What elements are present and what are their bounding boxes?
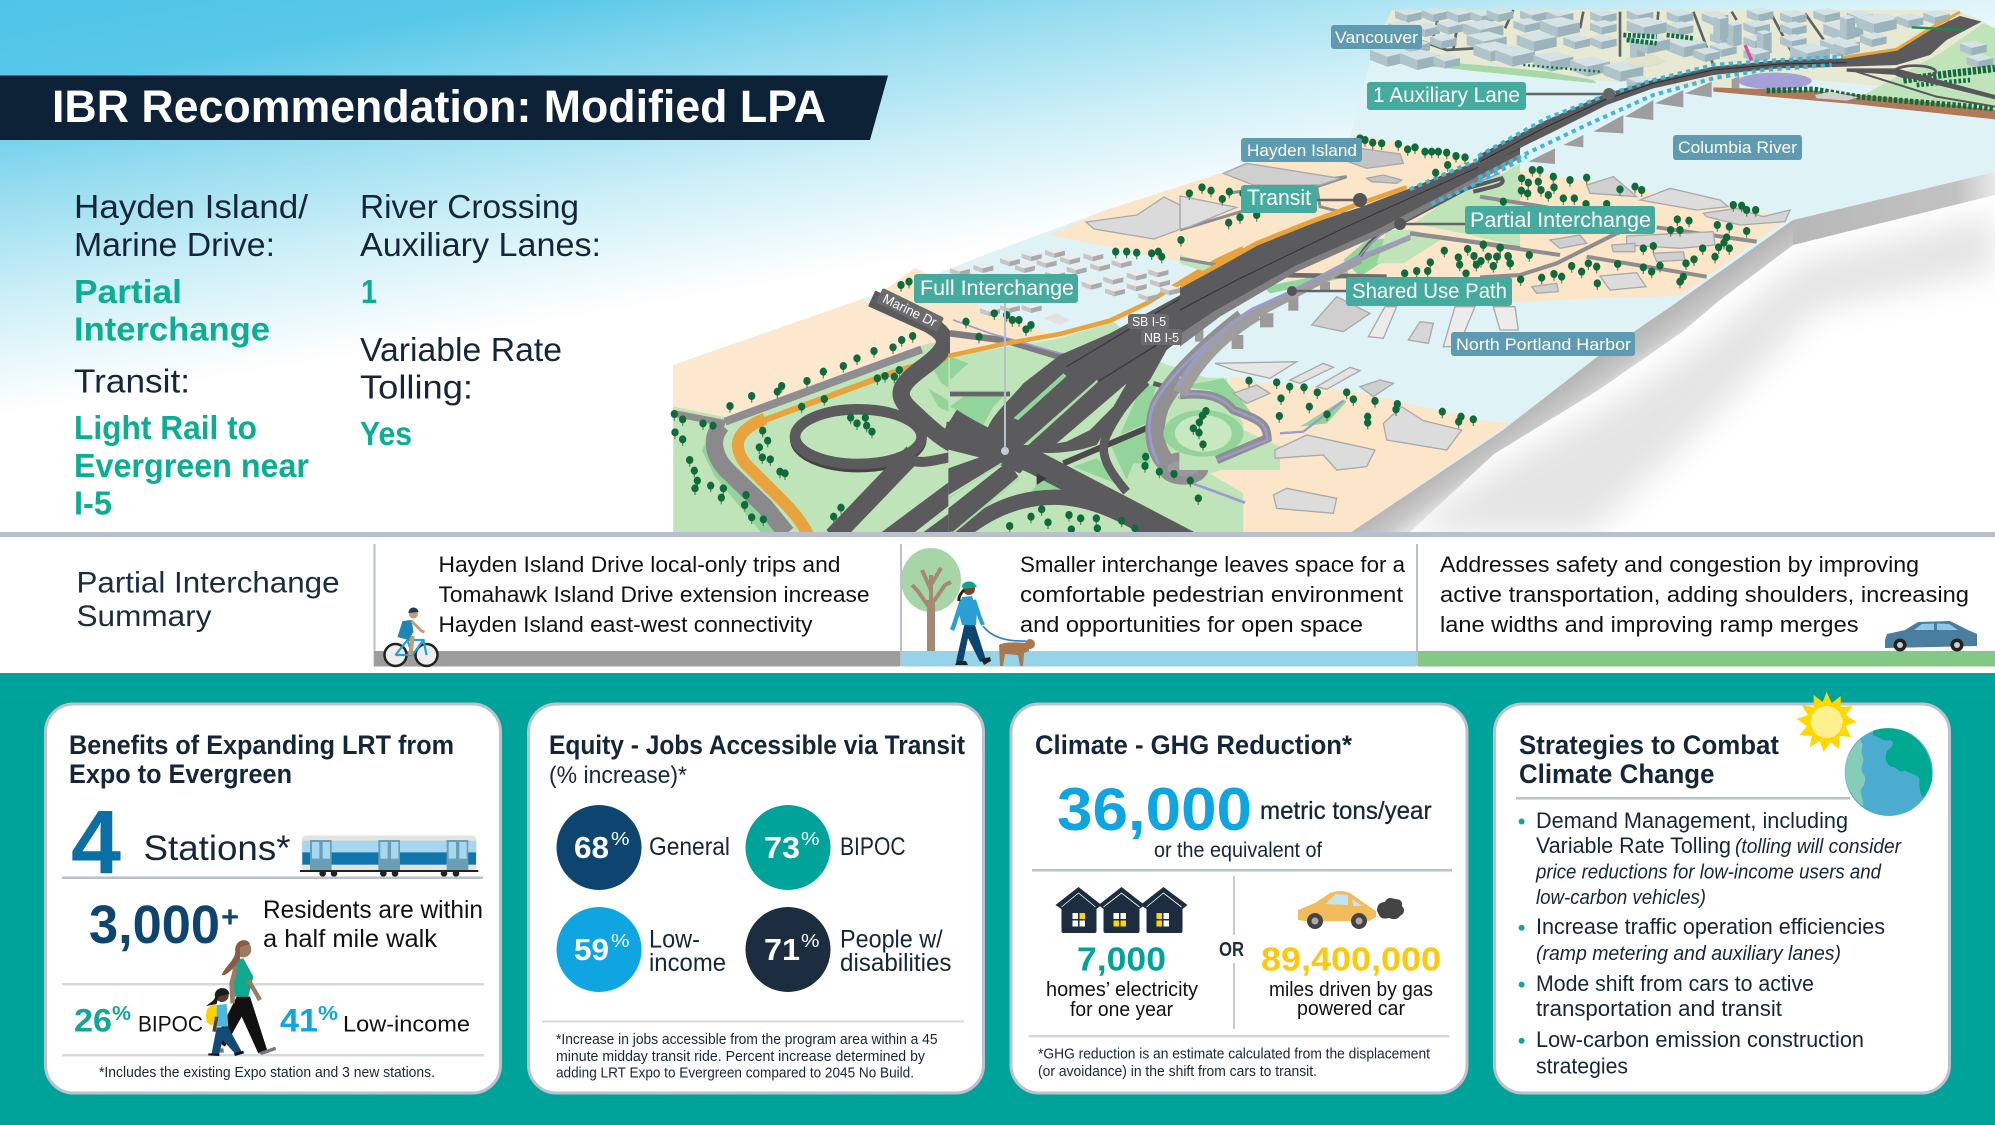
- heading: Partial Interchange Summary: Summary: [76, 600, 212, 633]
- stat circle: 73% BIPOC: BIPOC: [840, 833, 906, 861]
- recommendation summary: left column: Interchange: [74, 310, 270, 348]
- stat: 7,000 homes: [1046, 941, 1199, 1021]
- stat: 26% BIPOC: %: [112, 1003, 131, 1025]
- trees west area: [671, 278, 916, 526]
- stat: 3,000+ residents: Residents are within: [263, 896, 483, 924]
- summary text: connectivity: [438, 552, 870, 637]
- stat circle: 68% general: %: [611, 829, 630, 849]
- heading: strategies: Climate Change: [1519, 759, 1714, 789]
- map label: Transit: [1241, 185, 1367, 213]
- Oregon north shore land: [882, 268, 1100, 345]
- summary text: safety: lane widths and improving ramp merges: [1440, 612, 1858, 637]
- footnote: GHG: *GHG reduction is an estimate calculated from the displacement: [1038, 1047, 1430, 1063]
- icon: three houses: [1056, 887, 1188, 933]
- stat: 7,000 homes: 7,000: [1077, 941, 1166, 978]
- heading: equity: [549, 730, 965, 789]
- bullet list: strategies: Demand Management, including: [1536, 808, 1848, 833]
- platform edge walls: [1350, 172, 1995, 533]
- recommendation summary: left column: I-5: [74, 484, 112, 522]
- icon: light rail train: [300, 835, 478, 877]
- stat circle: 59% low-income: [556, 907, 726, 992]
- footnote: equity: *Increase in jobs accessible from the program area within a 45: [556, 1032, 938, 1048]
- stat: 4 stations: 4: [71, 793, 121, 893]
- stat circle: 68% general: [556, 805, 730, 890]
- trees central area: [962, 248, 1210, 536]
- bullet list: strategies: (tolling will consider: [1735, 836, 1902, 858]
- stat circle: 68% general: 68: [574, 830, 609, 865]
- heading: LRT benefits: Expo to Evergreen: [69, 759, 292, 789]
- map label: Transit: Transit: [1247, 185, 1311, 210]
- central interchange roads: [943, 248, 1245, 543]
- bullet list: strategies: strategies: [1536, 1054, 1628, 1078]
- summary text: pedestrian environment: [1020, 552, 1406, 637]
- panel: strategies: [1494, 692, 1950, 1093]
- rule under stations: [62, 876, 483, 879]
- stat: 4 stations: Stations*: [144, 829, 291, 868]
- recommendation summary: right column: Yes: [360, 415, 412, 452]
- bullet list: strategies: Mode shift from cars to active: [1536, 971, 1814, 996]
- recommendation summary: right column: Tolling:: [360, 368, 473, 406]
- recommendation summary: right column: 1: [361, 273, 377, 310]
- stat circle: 71% people with disabilities: People w/: [840, 926, 943, 954]
- stat: 36,000 metric tons per year: metric tons/year: [1260, 797, 1432, 825]
- stat: 26% BIPOC: 26: [74, 1003, 112, 1039]
- divider with OR: OR: [1219, 939, 1244, 961]
- heading: equity: Equity - Jobs Accessible via Transit: [549, 730, 965, 760]
- recommendation summary: left column: Evergreen near: [74, 447, 309, 484]
- recommendation summary: left column: Partial: [74, 273, 182, 310]
- recommendation summary: left column: [74, 188, 309, 522]
- recommendation summary: left column: Transit:: [74, 362, 190, 400]
- recommendation summary: right column: Variable Rate: [360, 331, 562, 368]
- stat: 4 stations: [71, 793, 291, 893]
- stat: 89,400,000 miles: 89,400,000: [1261, 941, 1441, 978]
- summary text: pedestrian environment: and opportunities for open space: [1020, 612, 1363, 637]
- bullet list: strategies: transportation and transit: [1536, 996, 1783, 1021]
- summary row background: [0, 537, 1995, 673]
- summary text: connectivity: Hayden Island Drive local-only trips and: [438, 552, 840, 577]
- heading: Partial Interchange Summary: Partial Interchange: [76, 566, 340, 600]
- bullet list: strategies: (ramp metering and auxiliary lanes): [1536, 943, 1841, 965]
- map label: Marine Dr: Marine Dr: [880, 291, 940, 330]
- map label: 1 Auxiliary Lane: [1367, 82, 1615, 110]
- summary text: safety: [1440, 552, 1969, 637]
- stat: 36,000 metric tons per year: [1057, 776, 1432, 862]
- stat: 89,400,000 miles: miles driven by gas: [1269, 978, 1433, 1001]
- map label: Vancouver: Vancouver: [1335, 28, 1418, 47]
- teal lower band: [0, 673, 1995, 1125]
- footnote: GHG: (or avoidance) in the shift from cars to transit.: [1038, 1064, 1317, 1080]
- stat: 7,000 homes: homes’ electricity: [1046, 978, 1199, 1001]
- recommendation summary: right column: River Crossing: [360, 188, 579, 225]
- stat circle: 73% BIPOC: 73: [764, 830, 800, 865]
- map label: 1 Auxiliary Lane: 1 Auxiliary Lane: [1373, 84, 1520, 107]
- heading: strategies: [1519, 730, 1779, 789]
- trees Hayden Island area: [1177, 134, 1514, 429]
- stat circle: 71% people with disabilities: disabilities: [840, 949, 952, 977]
- title banner: IBR Recommendation: Modified LPA: [52, 81, 826, 132]
- icon: car with exhaust: [1298, 891, 1404, 929]
- Hayden Island land: [1050, 135, 1790, 303]
- icon: car: [1885, 621, 1977, 652]
- summary text: pedestrian environment: comfortable pedestrian environment: [1020, 582, 1403, 607]
- footnote: equity: minute midday transit ride. Percent increase determined by: [556, 1049, 926, 1065]
- title banner: [0, 76, 888, 140]
- stat: 3,000+ residents: 3,000: [89, 895, 220, 955]
- bullet list: strategies: Low-carbon emission construction: [1536, 1027, 1864, 1052]
- icon: sun: [1797, 692, 1857, 752]
- Hayden Island, harbor and south mainland features: [1086, 138, 1527, 513]
- summary text: connectivity: Tomahawk Island Drive extension increase: [438, 582, 870, 607]
- recommendation summary: right column: [360, 188, 601, 452]
- stat circle: 59% low-income: Low-: [649, 926, 700, 954]
- rule under heading: [1516, 797, 1850, 800]
- bullet list: strategies: price reductions for low-income users and: [1535, 861, 1882, 883]
- map label: Full Interchange: [914, 274, 1078, 455]
- map label: North Portland Harbor: North Portland Harbor: [1456, 335, 1631, 354]
- city blocks: [1370, 7, 1993, 90]
- ground bars: [374, 651, 1995, 666]
- map label: Columbia River: Columbia River: [1678, 138, 1797, 157]
- stat: 41% low-income: %: [318, 1003, 338, 1025]
- south mainland land: [1100, 370, 1510, 533]
- recommendation summary: left column: Marine Drive:: [74, 226, 275, 263]
- river water: [673, 57, 1995, 533]
- icon: earth: [1845, 728, 1933, 816]
- recommendation summary: right column: Auxiliary Lanes:: [360, 226, 601, 263]
- map label: SB I-5: SB I-5: [1132, 314, 1166, 329]
- trees east Hayden Island: [1480, 166, 1759, 290]
- bullet list: strategies: [1519, 808, 1902, 1078]
- stat: 89,400,000 miles: [1261, 941, 1441, 1020]
- map label: Partial Interchange: Partial Interchange: [1470, 209, 1651, 232]
- heading: LRT benefits: Benefits of Expanding LRT from: [69, 730, 454, 760]
- summary text: safety: active transportation, adding shoulders, increasing: [1440, 582, 1969, 607]
- section divider rule: [0, 532, 1995, 537]
- panel: equity: [528, 704, 984, 1093]
- stat circle: 59% low-income: 59: [574, 932, 609, 967]
- heading: LRT benefits: [69, 730, 454, 789]
- icon: woman and child walking: [206, 940, 276, 1056]
- map label: Partial Interchange: [1394, 206, 1655, 234]
- stat: 36,000 metric tons per year: or the equivalent of: [1154, 839, 1322, 862]
- bullet list: strategies: Increase traffic operation efficiencies: [1536, 914, 1885, 939]
- recommendation summary: left column: Light Rail to: [74, 409, 257, 446]
- map label: Vancouver: [1331, 25, 1422, 49]
- rule above footnote: [542, 1020, 964, 1022]
- map label: NB I-5: NB I-5: [1144, 330, 1179, 345]
- map label: Full Interchange: Full Interchange: [920, 277, 1074, 300]
- stat: 89,400,000 miles: powered car: [1297, 997, 1405, 1020]
- rule under residents: [62, 983, 484, 986]
- Vancouver waterfront and bridge: [1370, 7, 1995, 293]
- icon: cyclist: [384, 607, 438, 666]
- stat: 26% BIPOC: [74, 1003, 203, 1039]
- stat circle: 59% low-income: %: [611, 931, 630, 951]
- stat: 3,000+ residents: [89, 895, 483, 955]
- stat: 41% low-income: Low-income: [343, 1012, 470, 1037]
- stat: 36,000 metric tons per year: 36,000: [1057, 776, 1252, 843]
- island and mainland buildings: [1086, 148, 1518, 513]
- stat: 26% BIPOC: BIPOC: [138, 1012, 203, 1037]
- marina houses: [950, 248, 1180, 325]
- map label: Hayden Island: Hayden Island: [1247, 141, 1357, 160]
- rule above footnote: [1028, 1035, 1450, 1038]
- heading: strategies: Strategies to Combat: [1519, 730, 1779, 760]
- footnote: GHG: [1038, 1047, 1430, 1080]
- stat: 41% low-income: 41: [280, 1003, 318, 1039]
- panel: climate GHG reduction: [1011, 704, 1467, 1093]
- summary column dividers: [374, 544, 1418, 666]
- footnote: equity: [556, 1032, 938, 1082]
- icon: tree: [901, 548, 961, 651]
- stat circle: 68% general: General: [649, 833, 730, 861]
- footnote: stations: *Includes the existing Expo station and 3 new stations.: [99, 1065, 435, 1081]
- stat circle: 73% BIPOC: %: [801, 829, 820, 849]
- stat circle: 71% people with disabilities: %: [801, 931, 820, 951]
- stat circle: 59% low-income: income: [649, 949, 726, 977]
- stat: 41% low-income: [280, 1003, 470, 1039]
- heading: equity: (% increase)*: [549, 762, 687, 789]
- heading: Partial Interchange Summary: [76, 566, 340, 633]
- map label: Shared Use Path: Shared Use Path: [1352, 280, 1507, 303]
- platform shadow: [1400, 215, 1995, 533]
- map label: Columbia River: [1673, 135, 1802, 160]
- rule: [1032, 869, 1452, 872]
- panel: LRT benefits: [46, 704, 500, 1093]
- recommendation summary: left column: Hayden Island/: [74, 188, 309, 225]
- west interchange area roads: [673, 298, 965, 537]
- summary text: pedestrian environment: Smaller interchange leaves space for a: [1020, 552, 1406, 577]
- rule above footnote: [62, 1054, 484, 1056]
- map label: Shared Use Path: [1287, 277, 1512, 306]
- bullet list: strategies: low-carbon vehicles): [1536, 887, 1706, 909]
- stat: 3,000+ residents: +: [221, 901, 239, 934]
- stat circle: 71% people with disabilities: [746, 907, 952, 992]
- stat: 7,000 homes: for one year: [1070, 998, 1173, 1021]
- stat circle: 73% BIPOC: [746, 805, 906, 890]
- summary text: connectivity: Hayden Island east-west connectivity: [438, 612, 812, 637]
- footnote: equity: adding LRT Expo to Evergreen compared to 2045 No Build.: [556, 1066, 914, 1082]
- summary text: safety: Addresses safety and congestion by improving: [1440, 552, 1919, 577]
- icon: person walking a dog: [952, 582, 1035, 666]
- stat circle: 71% people with disabilities: 71: [764, 932, 800, 967]
- 3D map of the corridor: [671, 7, 1995, 543]
- bullet list: strategies: Variable Rate Tolling: [1536, 833, 1731, 858]
- stat: 3,000+ residents: a half mile walk: [263, 925, 438, 953]
- sky background: [0, 0, 1995, 535]
- heading: climate: Climate - GHG Reduction*: [1035, 730, 1353, 760]
